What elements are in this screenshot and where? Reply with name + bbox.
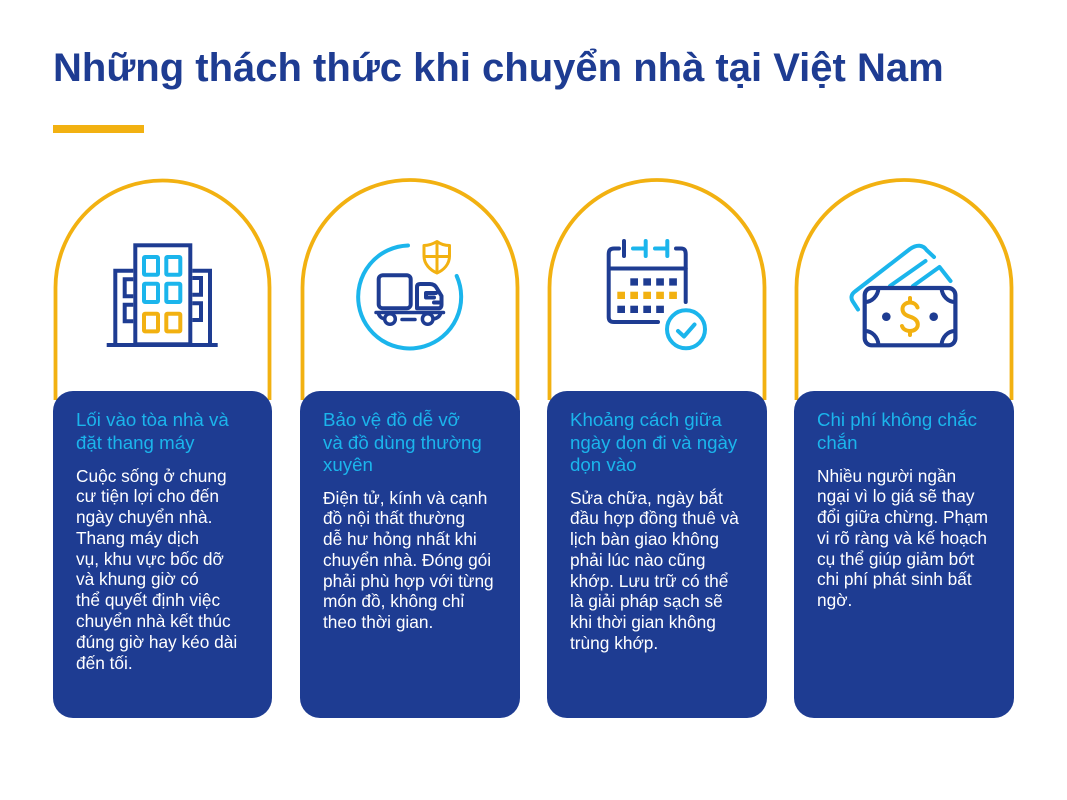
text: uncertain cost: đổi giữa chừng. Phạm	[817, 507, 988, 527]
text: timing gap: phải lúc nào cũng	[570, 550, 705, 570]
text: timing gap: đầu hợp đồng thuê và	[570, 508, 739, 528]
heading: building access: đặt thang máy	[76, 432, 194, 452]
text: protecting belongings: chuyển nhà. Đóng gói	[323, 550, 491, 570]
text: timing gap: lịch bàn giao không	[570, 529, 719, 549]
text: building access: cư tiện lợi cho đến	[76, 486, 219, 506]
panel: protecting belongings	[300, 391, 520, 718]
heading: protecting belongings: xuyên	[323, 454, 373, 475]
heading: uncertain cost: Chi phí không chắc	[817, 409, 977, 430]
text: uncertain cost: ngờ.	[817, 590, 852, 610]
arch outline 4	[796, 180, 1012, 400]
text: building access: và khung giờ có	[76, 569, 199, 589]
heading: timing gap	[570, 409, 738, 475]
heading: timing gap: ngày dọn đi và ngày	[570, 432, 737, 452]
icon: moving truck with shield	[358, 242, 461, 348]
text: building access: ngày chuyển nhà.	[76, 507, 212, 527]
heading: protecting belongings: và đồ dùng thường	[323, 432, 482, 452]
text: timing gap: khi thời gian không	[570, 612, 716, 632]
text: building access	[76, 466, 237, 673]
text: uncertain cost: vi rõ ràng và kế hoạch	[817, 528, 987, 548]
text: protecting belongings: Điện tử, kính và cạnh	[323, 488, 487, 508]
text: timing gap: là giải pháp sạch sẽ	[570, 591, 723, 611]
heading: protecting belongings	[323, 409, 482, 475]
heading: building access: Lối vào tòa nhà và	[76, 409, 229, 430]
text: timing gap: khớp. Lưu trữ có thể	[570, 571, 728, 591]
heading: uncertain cost: chắn	[817, 432, 858, 452]
heading: building access	[76, 409, 229, 453]
text: uncertain cost: ngại vì lo giá sẽ thay	[817, 486, 975, 506]
heading: timing gap: Khoảng cách giữa	[570, 409, 722, 430]
panel: timing gap	[547, 391, 766, 718]
heading: uncertain cost	[817, 409, 977, 452]
text: uncertain cost: chi phí phát sinh bất	[817, 569, 972, 589]
text: protecting belongings: dễ hư hỏng nhất khi	[323, 529, 477, 549]
text: building access: đến tối.	[76, 653, 133, 673]
text: protecting belongings: món đồ, không chỉ	[323, 591, 464, 611]
arch outline 3	[550, 180, 764, 400]
panel: uncertain cost	[794, 391, 1014, 718]
heading: timing gap: dọn vào	[570, 454, 637, 475]
text: building access: vụ, khu vực bốc dỡ	[76, 549, 224, 569]
text: uncertain cost	[817, 466, 988, 610]
text: timing gap	[570, 488, 739, 653]
arch outline 1	[56, 180, 270, 400]
arch outline 2	[302, 180, 518, 400]
text: uncertain cost: cụ thể giúp giảm bớt	[817, 549, 974, 569]
text: protecting belongings: theo thời gian.	[323, 612, 433, 632]
title: Những thách thức khi chuyển nhà tại Việt Nam	[53, 46, 944, 90]
icon: apartment building	[107, 245, 218, 345]
text: protecting belongings	[323, 488, 494, 632]
text: timing gap: trùng khớp.	[570, 633, 658, 653]
text: building access: Cuộc sống ở chung	[76, 466, 227, 486]
panel: building access	[53, 391, 272, 718]
heading: protecting belongings: Bảo vệ đồ dễ vỡ	[323, 409, 460, 430]
icon: banknote and cards	[851, 246, 955, 345]
text: protecting belongings: đồ nội thất thường	[323, 508, 465, 528]
text: timing gap: Sửa chữa, ngày bắt	[570, 488, 723, 508]
text: uncertain cost: Nhiều người ngần	[817, 466, 956, 486]
text: protecting belongings: phải phù hợp với từng	[323, 571, 494, 591]
text: building access: chuyển nhà kết thúc	[76, 611, 231, 631]
text: building access: Thang máy dịch	[76, 528, 199, 548]
icon: calendar with check mark	[609, 241, 705, 348]
title accent bar	[53, 125, 144, 133]
text: building access: đúng giờ hay kéo dài	[76, 632, 237, 652]
text: building access: thể quyết định việc	[76, 590, 220, 610]
